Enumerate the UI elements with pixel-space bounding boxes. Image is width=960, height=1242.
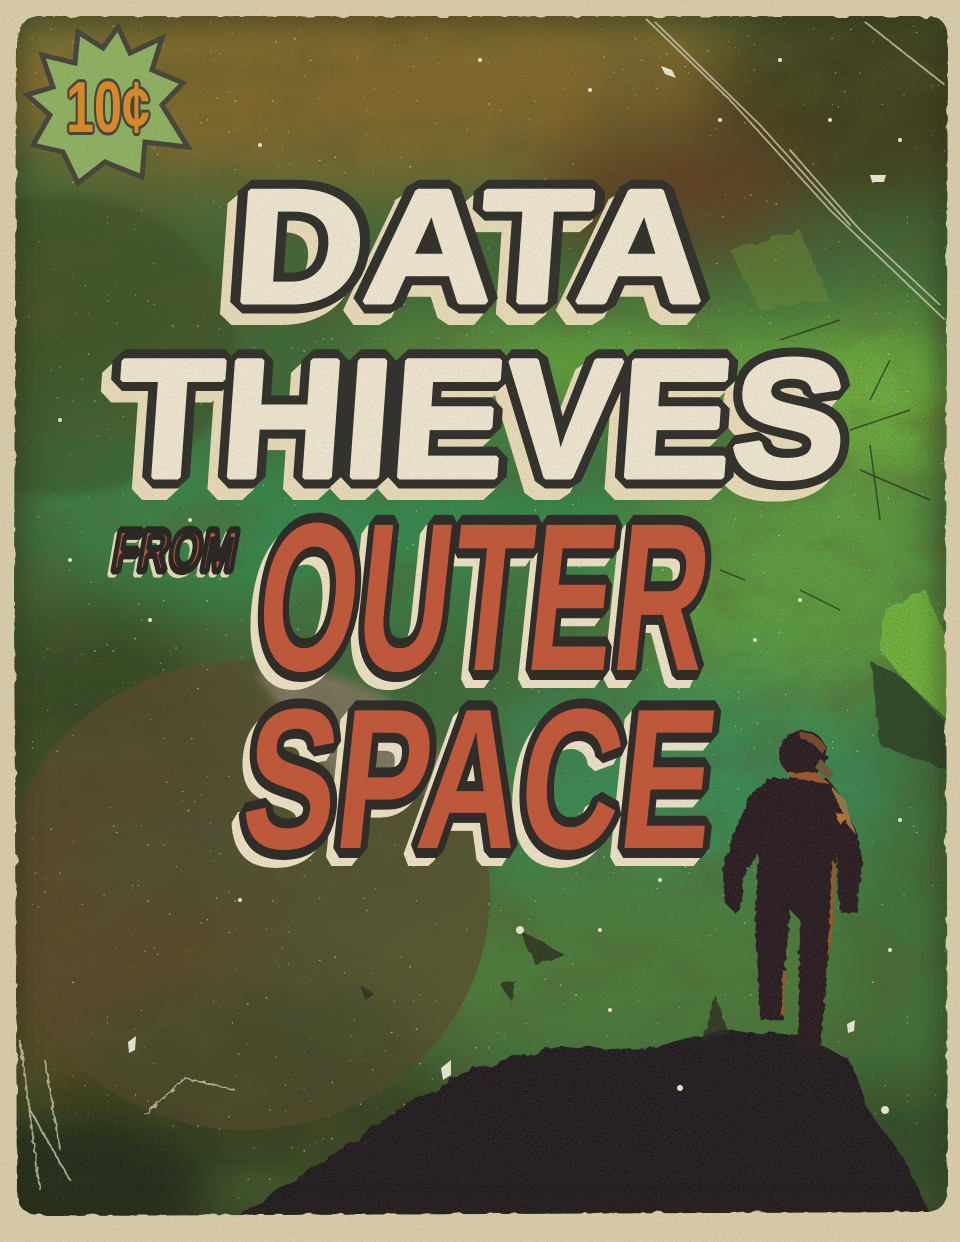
dark rocky ground	[225, 930, 935, 1225]
title line: OUTER	[239, 479, 721, 724]
price burst badge: 10¢	[66, 68, 150, 148]
price burst badge: 10¢	[66, 68, 150, 148]
upper left dark planet	[0, 195, 235, 495]
price burst badge	[27, 27, 188, 183]
vignette bottom left	[0, 1120, 210, 1242]
title: OUTER SPACE	[226, 479, 727, 900]
title line: SPACE: SPACE	[226, 676, 719, 900]
title line: SPACE: SPACE	[233, 667, 727, 891]
title line: SPACE: SPACE	[233, 667, 727, 891]
stars	[58, 58, 902, 1114]
title line: DATA: DATA	[218, 169, 702, 349]
subtitle: FROM: FROM	[104, 520, 240, 588]
title line: THIEVES: THIEVES	[111, 324, 853, 513]
astronaut	[723, 730, 863, 1050]
title line: DATA: DATA	[229, 157, 713, 337]
title line: SPACE	[226, 667, 727, 900]
subtitle: FROM: FROM	[108, 516, 244, 584]
title line: THIEVES: THIEVES	[111, 324, 853, 513]
green paint splash right	[730, 230, 948, 770]
title: DATA THIEVES	[101, 157, 853, 525]
planet	[0, 660, 490, 1130]
title line: THIEVES: THIEVES	[101, 336, 842, 525]
title line: DATA: DATA	[229, 157, 713, 337]
dark splatter marks	[720, 320, 930, 610]
